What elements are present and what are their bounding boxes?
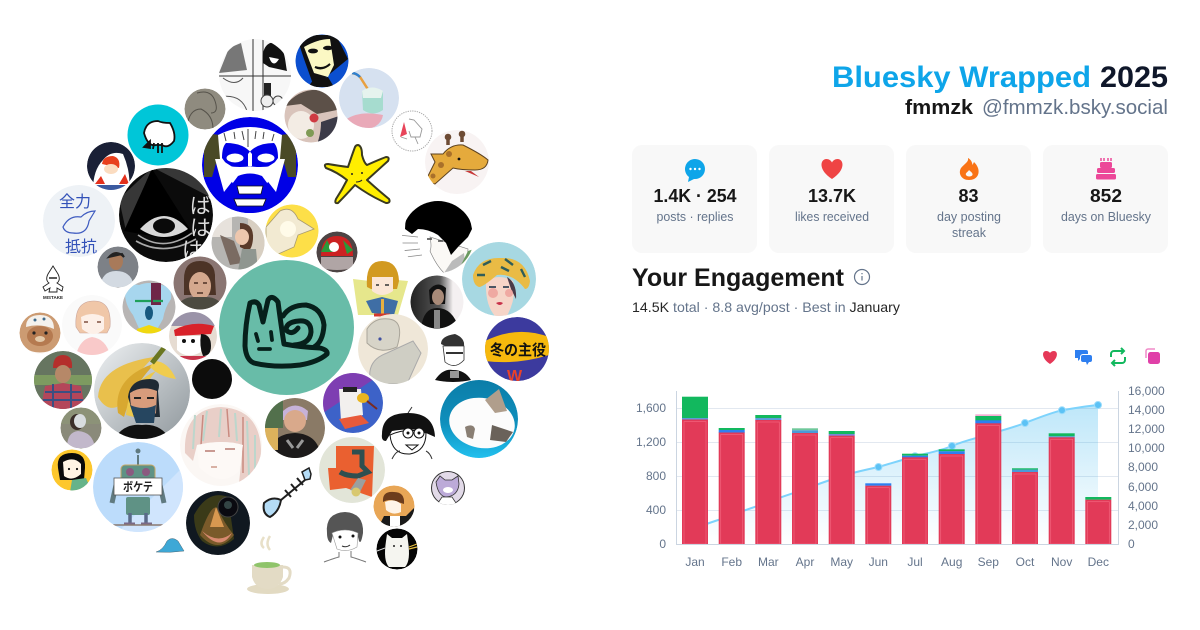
engagement summary: 14.5K total · 8.8 avg/post · Best in January xyxy=(632,299,900,315)
bar: Oct xyxy=(1012,468,1038,544)
avatar: black-haired face on blue xyxy=(296,34,348,88)
stat cards xyxy=(632,145,1168,253)
user handle: fmmzk xyxy=(905,97,974,119)
month labels: Feb xyxy=(721,555,742,569)
avatar: pale colored-pencil girl xyxy=(180,404,262,486)
month labels: May xyxy=(830,555,853,569)
chart legend icons xyxy=(1043,348,1160,366)
avatar: dark smiling face xyxy=(186,491,250,555)
avatar: winter newspaper ad xyxy=(485,317,549,385)
avatar: mistake logo figure xyxy=(43,266,63,300)
avatar: handwritten 全力抵抗 xyxy=(43,185,115,257)
card: posts and replies: posts · replies xyxy=(656,210,734,224)
bar: Jan xyxy=(682,397,708,544)
month labels: Jul xyxy=(907,555,923,569)
bar: Jul xyxy=(902,454,928,544)
avatar: handwritten 全力抵抗: 全力 xyxy=(59,193,91,211)
card: likes xyxy=(769,145,894,253)
legend: replies xyxy=(1075,350,1092,365)
avatar: violin collage xyxy=(323,373,383,433)
avatar: bear with bonnet xyxy=(20,312,60,355)
right axis labels: 12,000 xyxy=(1128,422,1165,436)
left axis labels: 400 xyxy=(646,503,666,517)
month labels: Dec xyxy=(1088,555,1109,569)
avatar: large teal logo xyxy=(219,260,354,395)
avatar: man with glasses xyxy=(435,334,471,382)
avatar: white spade with red pencil xyxy=(392,111,432,151)
user handle: @fmmzk.bsky.social xyxy=(982,97,1168,119)
avatar: eye in black triangle: は xyxy=(182,239,203,262)
avatar: manga panel xyxy=(219,39,291,111)
right axis labels: 8,000 xyxy=(1128,460,1158,474)
avatar: brown-haired boy on orange xyxy=(374,486,416,528)
right axis labels: 4,000 xyxy=(1128,499,1158,513)
avatar: mushroom-haired cartoon xyxy=(382,407,435,459)
avatar: eye in black triangle xyxy=(119,165,214,262)
avatar: white bird on teal xyxy=(128,104,188,166)
card: streak: day posting xyxy=(937,210,1001,224)
avatar: gray sketch xyxy=(184,88,226,130)
legend: reposts xyxy=(1111,348,1125,366)
card: likes: likes received xyxy=(795,210,869,224)
left axis labels: 1,200 xyxy=(636,435,666,449)
icon: heart xyxy=(822,159,842,179)
month labels: Mar xyxy=(758,555,779,569)
card: streak: 83 xyxy=(958,186,978,206)
avatar: schoolgirl with blonde bob xyxy=(353,261,408,315)
avatar: red and green badge xyxy=(316,232,358,272)
right axis labels: 2,000 xyxy=(1128,518,1158,532)
right axis labels: 16,000 xyxy=(1128,384,1165,398)
icon: cup of green tea xyxy=(247,536,290,594)
right axis labels: 0 xyxy=(1128,537,1135,551)
right axis labels: 10,000 xyxy=(1128,441,1165,455)
bar: May xyxy=(829,431,855,544)
card: likes: 13.7K xyxy=(808,186,856,206)
bar: Jun xyxy=(865,483,891,544)
avatar: man with bananas xyxy=(94,343,190,439)
engagement chart xyxy=(636,384,1165,569)
avatar: eye in black triangle: は xyxy=(190,217,211,240)
avatar cloud xyxy=(20,34,549,594)
gridlines xyxy=(677,408,1119,510)
avatar: dark man in black jacket xyxy=(410,276,464,329)
bar: Feb xyxy=(719,428,745,544)
legend: quotes xyxy=(1146,349,1160,364)
month labels: Oct xyxy=(1016,555,1035,569)
avatar: cream soda xyxy=(339,68,399,130)
bar: Apr xyxy=(792,428,818,544)
month labels: Sep xyxy=(978,555,999,569)
card: posts and replies: 1.4K · 254 xyxy=(654,186,736,206)
avatar: black-haired boy xyxy=(398,200,474,273)
right axis labels: 6,000 xyxy=(1128,480,1158,494)
axis lines xyxy=(676,391,1118,544)
legend: likes xyxy=(1043,351,1057,364)
icon: fishbone xyxy=(264,468,311,517)
avatar: yellow circle with bobbed girl xyxy=(52,450,92,492)
month labels xyxy=(685,555,1109,569)
icon: flame xyxy=(960,158,979,180)
avatar: man in white shirt xyxy=(98,246,138,288)
left axis labels xyxy=(636,401,666,551)
avatar: giraffe xyxy=(425,130,489,194)
month labels: Aug xyxy=(941,555,962,569)
avatar: halftone-haired boy sketch xyxy=(324,512,366,562)
avatar: man with beer xyxy=(265,398,325,458)
avatar: white cat on black xyxy=(376,528,418,570)
avatar: black circle xyxy=(192,359,232,399)
right axis labels xyxy=(1128,384,1165,551)
avatar: figure on orange sofa xyxy=(319,437,385,503)
icon: blue blob xyxy=(156,538,184,552)
avatar: robot holding sign xyxy=(93,442,183,532)
avatar: woman on grass xyxy=(60,408,102,448)
avatar: blue masked face xyxy=(202,117,298,213)
avatar: man with mop hair xyxy=(174,256,226,311)
left axis labels: 0 xyxy=(659,537,666,551)
heading: Your Engagement: Your Engagement xyxy=(632,264,845,292)
right axis labels: 14,000 xyxy=(1128,403,1165,417)
card: days on Bluesky: days on Bluesky xyxy=(1061,210,1152,224)
card: streak: streak xyxy=(952,226,987,240)
bar: Mar xyxy=(755,415,781,544)
bar: Nov xyxy=(1049,433,1075,544)
left axis labels: 1,600 xyxy=(636,401,666,415)
bar: Sep xyxy=(975,414,1001,544)
avatar: fluffy animal with hair xyxy=(284,90,339,144)
icon: info xyxy=(854,270,870,284)
icon: yellow star character xyxy=(325,145,390,203)
avatar: mistake logo figure: MISTAKE xyxy=(43,295,63,300)
avatar: blue koala xyxy=(122,280,176,335)
avatar: robot holding sign: ボケテ xyxy=(123,480,153,494)
avatar: beige sketch girl xyxy=(358,314,428,384)
month labels: Jan xyxy=(685,555,705,569)
avatar: winter newspaper ad: 冬の主役 xyxy=(490,341,546,359)
avatar: eye in black triangle: ば xyxy=(190,195,211,218)
card: streak xyxy=(906,145,1031,253)
month labels: Jun xyxy=(869,555,888,569)
icon: chat bubble xyxy=(685,159,705,182)
cumulative area and line xyxy=(696,402,1102,544)
avatar: purple pig badge xyxy=(431,471,465,506)
icon: birthday cake xyxy=(1096,158,1116,180)
avatar: man in red beanie and plaid xyxy=(34,351,92,409)
card: days on Bluesky xyxy=(1043,145,1168,253)
avatar: pale pink-haired girl xyxy=(76,300,110,355)
month labels: Nov xyxy=(1051,555,1072,569)
month labels: Apr xyxy=(796,555,814,569)
user handle xyxy=(905,97,1168,119)
avatar: girl reading xyxy=(212,216,266,271)
avatar: handwritten 全力抵抗: 抵抗 xyxy=(65,238,97,256)
avatar: sleeping cat xyxy=(440,380,519,458)
bar: Aug xyxy=(939,449,965,544)
left axis labels: 800 xyxy=(646,469,666,483)
title: 2025 xyxy=(1100,61,1168,94)
card: posts and replies xyxy=(632,145,757,253)
bar: Dec xyxy=(1085,497,1111,544)
avatar: winter newspaper ad: W xyxy=(507,368,523,385)
avatar: red-haired character xyxy=(87,142,135,191)
avatar: yellow monkey xyxy=(266,204,318,258)
card: days on Bluesky: 852 xyxy=(1090,186,1122,206)
avatar: flower crown girl xyxy=(462,242,536,316)
avatar: red hat dog xyxy=(169,312,217,360)
stacked bars xyxy=(682,397,1111,544)
title: Bluesky Wrapped xyxy=(832,61,1091,94)
